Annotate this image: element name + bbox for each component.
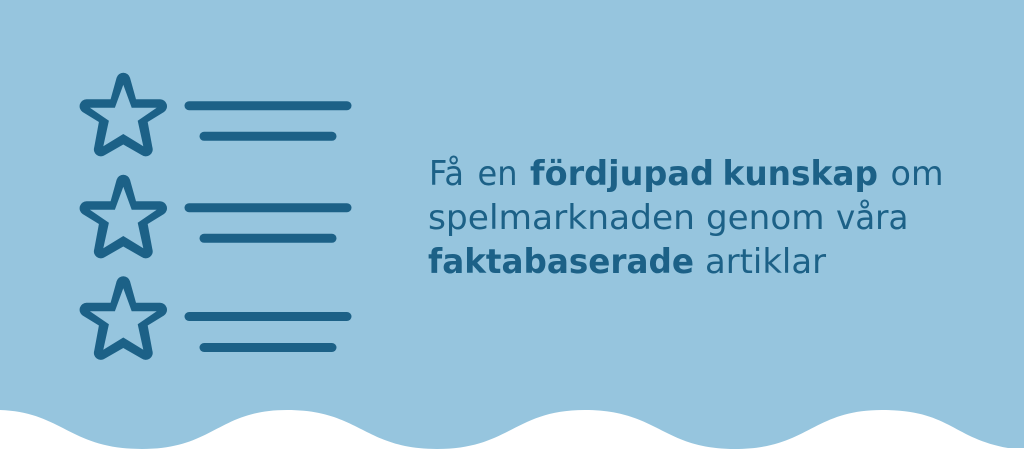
line 1b xyxy=(204,132,332,141)
icon: star list xyxy=(80,73,347,360)
text block: genom xyxy=(706,198,824,238)
line 3b xyxy=(204,343,332,352)
line 2b xyxy=(204,234,332,243)
text block: kunskap xyxy=(722,154,878,194)
wavy white bottom edge xyxy=(0,410,1024,455)
line 1a xyxy=(189,101,347,110)
text block: våra xyxy=(836,198,908,238)
text block: fördjupad xyxy=(530,154,714,194)
line 3a xyxy=(189,312,347,321)
text block: spelmarknaden xyxy=(428,198,695,238)
icon: star 1 xyxy=(80,73,167,156)
text block: Få xyxy=(429,154,464,194)
icon: star 2 xyxy=(80,175,167,258)
text block: om xyxy=(890,154,944,194)
icon: star 3 xyxy=(80,276,167,360)
text block: artiklar xyxy=(705,242,826,282)
line 2a xyxy=(189,203,347,212)
text block: faktabaserade xyxy=(428,242,694,282)
text block: en xyxy=(478,154,518,194)
text block xyxy=(428,154,944,282)
